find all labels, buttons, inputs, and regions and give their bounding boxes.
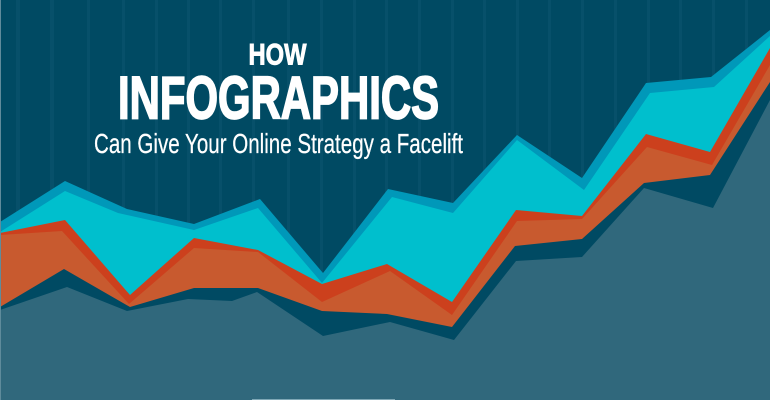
series: slate front area (0, 100, 770, 400)
title line: INFOGRAPHICS: INFOGRAPHICS (118, 64, 439, 132)
title (94, 38, 463, 159)
title line: HOW: HOW (248, 38, 307, 72)
series: dark shadow area (0, 82, 770, 400)
subtitle: Can Give Your Online Strategy a Facelift (94, 128, 463, 159)
